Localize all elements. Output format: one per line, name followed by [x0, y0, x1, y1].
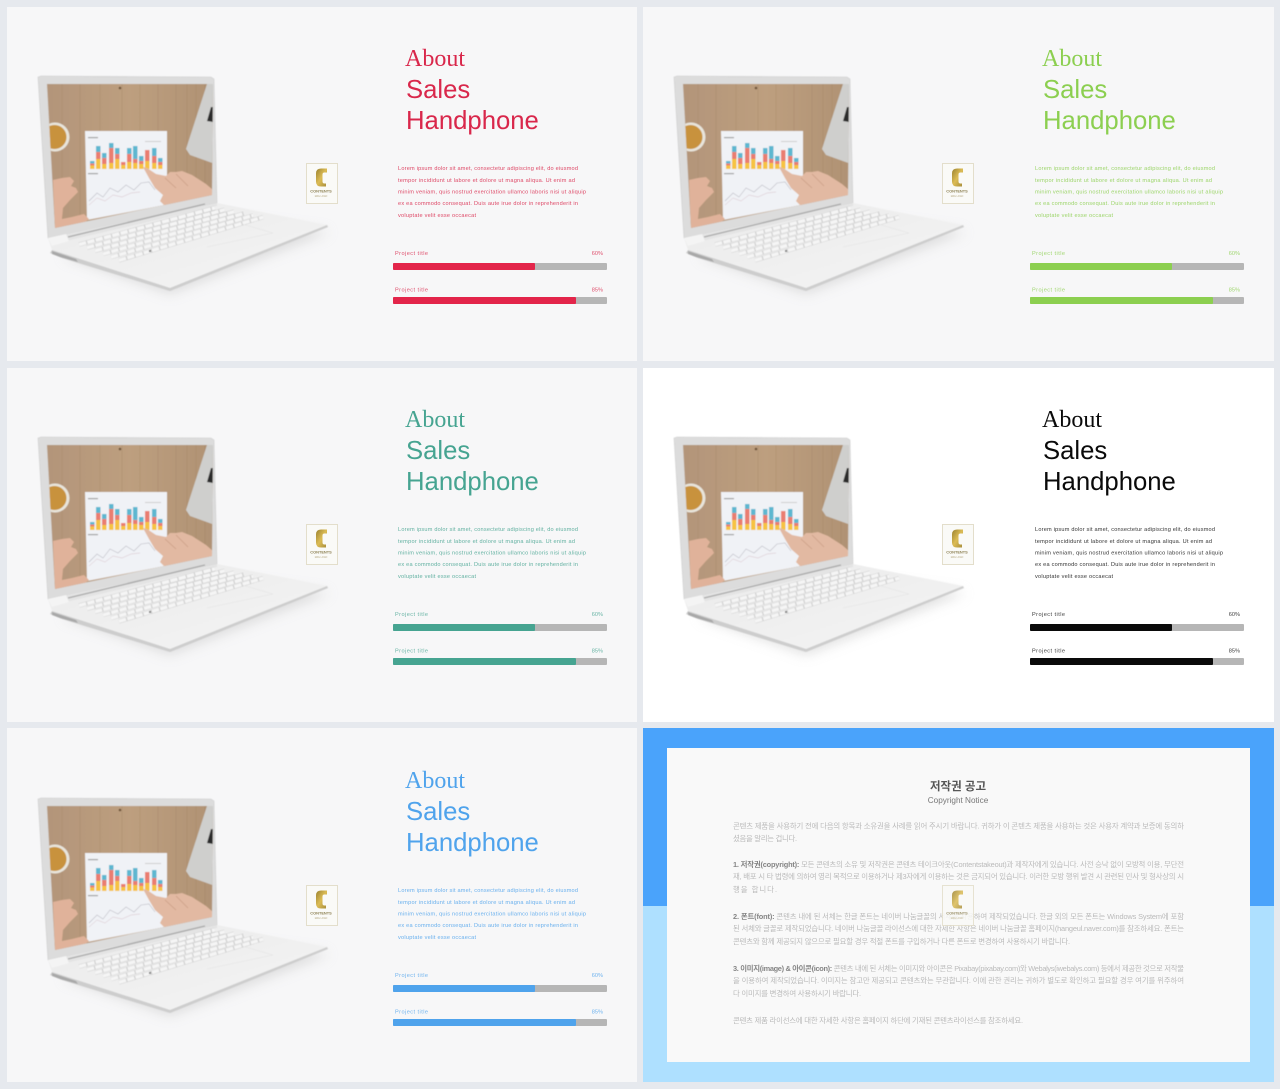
progress bar 85%: Project title — [395, 288, 428, 294]
clause 1 copyright: 1. 저작권(copyright): 모든 콘텐츠의 소유 및 저작권은 콘텐츠 테이크아웃(Contentstakeout)과 제작자에게 있습니다. 사전 승낙 없이 모방적 이용, 무단전 — [733, 860, 1184, 869]
progress bar 85% — [393, 288, 607, 304]
title: Sales — [406, 798, 470, 826]
title: Sales — [1043, 76, 1107, 104]
title: Handphone — [406, 107, 539, 135]
title — [1042, 407, 1176, 496]
intro text: 셨음을 알리는 겁니다. — [733, 834, 797, 843]
title: About — [1042, 46, 1102, 72]
logo badge: MAIL LOGO — [951, 556, 963, 559]
title — [405, 46, 539, 135]
laptop image — [38, 437, 330, 655]
laptop image — [38, 76, 330, 294]
description: tempor incididunt ut labore et dolore ut magna aliqua. Ut enim ad — [1035, 539, 1212, 545]
progress bar 60%: Project title — [395, 612, 428, 618]
description: Lorem ipsum dolor sit amet, consectetur adipiscing elit, do eiusmod — [398, 527, 578, 533]
intro text — [733, 822, 1184, 843]
notice heading — [928, 779, 989, 805]
logo badge — [942, 524, 974, 564]
logo badge — [306, 524, 338, 564]
logo badge: CONTENTS — [310, 188, 332, 194]
title: About — [405, 768, 465, 794]
description: tempor incididunt ut labore et dolore ut magna aliqua. Ut enim ad — [398, 539, 575, 545]
description: ex ea commodo consequat. Duis aute irue dolor in reprehenderit in — [1035, 562, 1215, 568]
description — [398, 166, 586, 219]
title: About — [1042, 407, 1102, 433]
progress bar 60%: Project title — [395, 973, 428, 979]
panel: teal slide — [7, 368, 637, 722]
logo badge: CONTENTS — [946, 550, 968, 554]
description: minim veniam, quis nostrud exercitation ullamco laboris nisi ut aliquip — [1035, 550, 1223, 556]
clause 1 copyright: 행을 합니다. — [733, 885, 777, 894]
description — [1035, 166, 1223, 219]
title — [1042, 46, 1176, 135]
progress bar 60% — [393, 251, 607, 270]
notice heading: Copyright Notice — [928, 796, 989, 805]
description: voluptate velit esse occaecat — [398, 213, 476, 219]
closing line: 콘텐츠 제품 라이선스에 대한 자세한 사항은 홈페이지 하단에 기재된 콘텐츠라이선스를 참조하세요. — [733, 1016, 1023, 1025]
logo badge: CONTENTS — [946, 188, 968, 194]
laptop image — [674, 437, 966, 655]
description: tempor incididunt ut labore et dolore ut magna aliqua. Ut enim ad — [398, 900, 575, 906]
description: tempor incididunt ut labore et dolore ut magna aliqua. Ut enim ad — [398, 178, 575, 184]
description — [1035, 527, 1223, 580]
progress bar 85%: 85% — [1229, 648, 1240, 654]
description: tempor incididunt ut labore et dolore ut magna aliqua. Ut enim ad — [1035, 178, 1212, 184]
clause 3 image and icon: 3. 이미지(image) & 아이콘(icon): 콘텐츠 내에 된 서체는 이미지와 아이콘은 Pixabay(pixabay.com)와 Webalys(iwebalys.com) 등에서 제공한 것으로 저작물 — [733, 964, 1184, 973]
description — [398, 527, 586, 580]
title: About — [405, 407, 465, 433]
progress bar 85%: 85% — [1229, 288, 1240, 294]
clause 1 copyright — [733, 860, 1184, 894]
progress bar 60% — [1030, 612, 1244, 631]
progress bar 85%: Project title — [395, 1010, 428, 1016]
clause 2 font — [733, 912, 1184, 946]
description: minim veniam, quis nostrud exercitation ullamco laboris nisi ut aliquip — [398, 190, 586, 196]
panel: copyright notice — [643, 728, 1274, 1082]
laptop image — [674, 76, 966, 294]
clause 2 font: 2. 폰트(font): 콘텐츠 내에 된 서체는 한글 폰트는 네이버 나눔글꼴의 서체를 사용하여 제작되었습니다. 한글 외의 모든 폰트는 Windows System에 포함 — [733, 912, 1184, 921]
clause 3 image and icon: 다 이미지를 변경하여 사용하시기 바랍니다. — [733, 989, 861, 998]
description: Lorem ipsum dolor sit amet, consectetur adipiscing elit, do eiusmod — [1035, 527, 1215, 533]
clause 1 copyright: 재, 배포 시 타 법령에 의하여 영리 목적으로 이용하거나 제3자에게 이용하는 것은 금지되어 있습니다. 이러한 모방 행위 발견 시 관련된 민사 및 형사상의 시 — [733, 872, 1184, 881]
progress bar 85% — [393, 648, 607, 665]
notice card — [667, 748, 1250, 1062]
title: Handphone — [1043, 468, 1176, 496]
notice heading: 저작권 공고 — [930, 779, 986, 793]
title — [405, 768, 539, 857]
description: minim veniam, quis nostrud exercitation ullamco laboris nisi ut aliquip — [398, 550, 586, 556]
clause 3 image and icon: 을 이용하여 제작되었습니다. 이미지는 참고만 제공되고 콘텐츠와는 무관합니다. 이에 관한 권리는 귀하가 별도로 확인하고 필요할 경우 여기를 위주하여 — [733, 976, 1184, 985]
logo badge overlay: MAIL LOGO — [951, 917, 963, 920]
laptop image — [38, 798, 330, 1016]
progress bar 60%: 60% — [1229, 612, 1240, 618]
logo badge overlay: CONTENTS — [946, 910, 968, 916]
progress bar 60%: Project title — [1032, 612, 1065, 618]
logo badge — [306, 164, 338, 204]
title — [405, 407, 539, 496]
title: Handphone — [406, 468, 539, 496]
description: voluptate velit esse occaecat — [398, 935, 476, 941]
logo badge — [306, 886, 338, 926]
title: About — [405, 46, 465, 72]
description: voluptate velit esse occaecat — [398, 574, 476, 580]
logo badge overlay — [942, 886, 974, 926]
description: ex ea commodo consequat. Duis aute irue dolor in reprehenderit in — [1035, 201, 1215, 207]
description: voluptate velit esse occaecat — [1035, 574, 1113, 580]
panel: red slide — [7, 7, 637, 361]
description: Lorem ipsum dolor sit amet, consectetur adipiscing elit, do eiusmod — [398, 888, 578, 894]
progress bar 60%: Project title — [395, 251, 428, 257]
progress bar 60%: 60% — [592, 251, 603, 257]
progress bar 60% — [393, 973, 607, 992]
progress bar 85% — [1030, 648, 1244, 665]
progress bar 85%: 85% — [592, 288, 603, 294]
logo badge — [942, 164, 974, 204]
description: voluptate velit esse occaecat — [1035, 213, 1113, 219]
progress bar 85%: 85% — [592, 1010, 603, 1016]
progress bar 85%: 85% — [592, 648, 603, 654]
progress bar 85%: Project title — [1032, 648, 1065, 654]
description: ex ea commodo consequat. Duis aute irue dolor in reprehenderit in — [398, 923, 578, 929]
description: Lorem ipsum dolor sit amet, consectetur adipiscing elit, do eiusmod — [398, 166, 578, 172]
title: Sales — [406, 437, 470, 465]
title: Handphone — [406, 829, 539, 857]
description: minim veniam, quis nostrud exercitation ullamco laboris nisi ut aliquip — [398, 912, 586, 918]
logo badge: MAIL LOGO — [315, 556, 327, 559]
description: ex ea commodo consequat. Duis aute irue dolor in reprehenderit in — [398, 562, 578, 568]
logo badge: MAIL LOGO — [315, 917, 327, 920]
progress bar 85%: Project title — [1032, 288, 1065, 294]
description: minim veniam, quis nostrud exercitation ullamco laboris nisi ut aliquip — [1035, 190, 1223, 196]
progress bar 85% — [393, 1010, 607, 1026]
progress bar 60%: 60% — [1229, 251, 1240, 257]
clause 2 font: 된 서체와 글꼴로 제작되었습니다. 네이버 나눔글꼴 라이선스에 대한 자세한 사항은 네이버 나눔글꼴 홈페이지(hangeul.naver.com)를 참조하세요. 폰트는 — [733, 924, 1184, 933]
title: Sales — [406, 76, 470, 104]
progress bar 85%: Project title — [395, 648, 428, 654]
progress bar 60% — [393, 612, 607, 631]
logo badge: MAIL LOGO — [315, 195, 327, 198]
progress bar 85% — [1030, 288, 1244, 304]
clause 3 image and icon — [733, 964, 1184, 998]
description — [398, 888, 586, 941]
logo badge: CONTENTS — [310, 550, 332, 554]
panel: green slide — [643, 7, 1274, 361]
panel: black slide — [643, 368, 1274, 722]
progress bar 60%: 60% — [592, 973, 603, 979]
logo badge: MAIL LOGO — [951, 195, 963, 198]
panel: blue slide — [7, 728, 637, 1082]
progress bar 60% — [1030, 251, 1244, 270]
intro text: 콘텐츠 제품을 사용하기 전에 다음의 항목과 소유권을 사례를 읽어 주시기 바랍니다. 귀하가 이 콘텐츠 제품을 사용하는 것은 사용자 계약과 보증에 동의하 — [733, 822, 1184, 830]
logo badge: CONTENTS — [310, 910, 332, 916]
title: Handphone — [1043, 107, 1176, 135]
progress bar 60%: Project title — [1032, 251, 1065, 257]
title: Sales — [1043, 437, 1107, 465]
progress bar 60%: 60% — [592, 612, 603, 618]
description: ex ea commodo consequat. Duis aute irue dolor in reprehenderit in — [398, 201, 578, 207]
description: Lorem ipsum dolor sit amet, consectetur adipiscing elit, do eiusmod — [1035, 166, 1215, 172]
clause 2 font: 콘텐츠와 함께 제공되지 않으므로 필요할 경우 적절 폰트를 구입하거나 다른 폰트로 변경하여 사용하시기 바랍니다. — [733, 937, 1070, 946]
